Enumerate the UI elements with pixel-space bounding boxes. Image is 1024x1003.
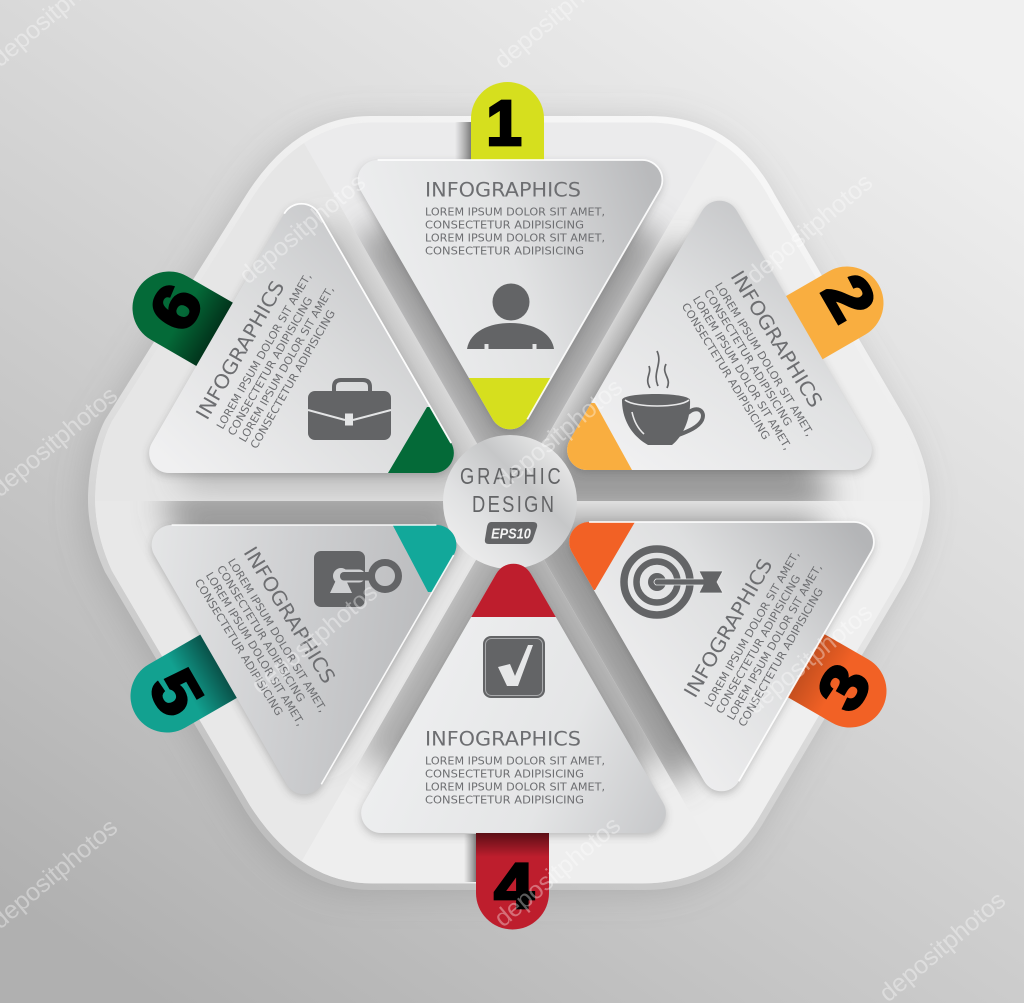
- text block 2: LOREM IPSUM DOLOR SIT AMET,: [690, 294, 794, 452]
- text block 5: LOREM IPSUM DOLOR SIT AMET,: [225, 556, 329, 715]
- centre circle: [443, 435, 577, 569]
- body text 1: LOREM IPSUM DOLOR SIT AMET,: [425, 232, 605, 244]
- text block 3: CONSECTETUR ADIPISICING: [713, 573, 803, 716]
- watermarks: depositphotos: [246, 578, 383, 700]
- panel 3: [552, 517, 874, 791]
- tab 5: [117, 624, 255, 746]
- text block 2: CONSECTETUR ADIPISICING: [679, 301, 772, 442]
- number 4: 4: [494, 851, 534, 922]
- text block 2: [679, 267, 838, 459]
- text block 5: CONSECTETUR ADIPISICING: [192, 577, 285, 718]
- text block 6: CONSECTETUR ADIPISICING: [248, 308, 338, 451]
- text block 5: CONSECTETUR ADIPISICING: [214, 563, 308, 704]
- icon: target: [624, 549, 723, 615]
- text block 2: INFOGRAPHICS: [726, 267, 827, 412]
- watermarks: depositphotos: [741, 168, 878, 290]
- triangle drop shadows: [149, 163, 874, 836]
- text block 3: CONSECTETUR ADIPISICING: [736, 586, 826, 729]
- text block 6: [191, 258, 348, 451]
- number 1: 1: [486, 87, 522, 159]
- text block 5: LOREM IPSUM DOLOR SIT AMET,: [203, 570, 307, 728]
- icon: check box: [483, 636, 545, 698]
- centre subtitle: DESIGN: [472, 492, 556, 518]
- hexagon shadow: [82, 120, 924, 894]
- text block 6: LOREM IPSUM DOLOR SIT AMET,: [236, 284, 337, 444]
- body text 4: CONSECTETUR ADIPISICING: [425, 794, 584, 806]
- EPS10 badge: EPS10: [491, 524, 531, 542]
- text block 5: INFOGRAPHICS: [239, 543, 340, 688]
- heading 4: INFOGRAPHICS: [425, 728, 581, 750]
- heading 1: INFOGRAPHICS: [425, 178, 581, 202]
- tab 6: [119, 258, 257, 380]
- body text 1: CONSECTETUR ADIPISICING: [425, 244, 584, 258]
- tab 1: [471, 82, 544, 160]
- tab 2: [768, 251, 900, 370]
- number 2: 2: [808, 263, 890, 333]
- watermarks: depositphotos: [741, 598, 878, 720]
- text block 5: [192, 543, 351, 735]
- body text 4: LOREM IPSUM DOLOR SIT AMET,: [425, 780, 605, 794]
- watermarks: depositphotos: [489, 811, 626, 933]
- body text 1: CONSECTETUR ADIPISICING: [425, 218, 584, 232]
- number 3: 3: [803, 653, 885, 723]
- body text 4: LOREM IPSUM DOLOR SIT AMET,: [425, 754, 605, 768]
- icon: person: [467, 284, 554, 350]
- body text 1: [425, 206, 605, 258]
- text block 2: CONSECTETUR ADIPISICING: [701, 287, 795, 428]
- body text 4: [425, 754, 605, 806]
- number 6: 6: [135, 273, 217, 343]
- panel 5: [152, 520, 474, 794]
- watermarks: depositphotos: [491, 373, 628, 495]
- icon: key and lock: [314, 551, 398, 607]
- panel 1: [358, 160, 662, 450]
- tab 4: [476, 825, 549, 930]
- panel 6: [149, 204, 472, 483]
- panel 4: [361, 553, 666, 833]
- hexagon base: [60, 110, 960, 900]
- text block 2: LOREM IPSUM DOLOR SIT AMET,: [712, 280, 816, 439]
- icon: briefcase: [308, 380, 391, 440]
- body text 1: LOREM IPSUM DOLOR SIT AMET,: [425, 206, 605, 218]
- text block 3: LOREM IPSUM DOLOR SIT AMET,: [724, 562, 825, 722]
- body text 4: CONSECTETUR ADIPISICING: [425, 768, 584, 780]
- text block 3: INFOGRAPHICS: [679, 555, 777, 702]
- watermarks: depositphotos: [234, 168, 371, 290]
- text block 6: CONSECTETUR ADIPISICING: [225, 295, 315, 438]
- text block 6: INFOGRAPHICS: [191, 277, 289, 424]
- panel 2: [550, 201, 872, 480]
- text block 3: LOREM IPSUM DOLOR SIT AMET,: [702, 549, 802, 710]
- text block 3: [679, 536, 836, 729]
- tab strip shadows: [455, 122, 477, 882]
- tab 3: [771, 624, 900, 741]
- number 5: 5: [135, 658, 217, 728]
- icon: coffee cup: [622, 351, 703, 445]
- centre title: GRAPHIC: [460, 464, 564, 490]
- text block 6: LOREM IPSUM DOLOR SIT AMET,: [214, 271, 314, 432]
